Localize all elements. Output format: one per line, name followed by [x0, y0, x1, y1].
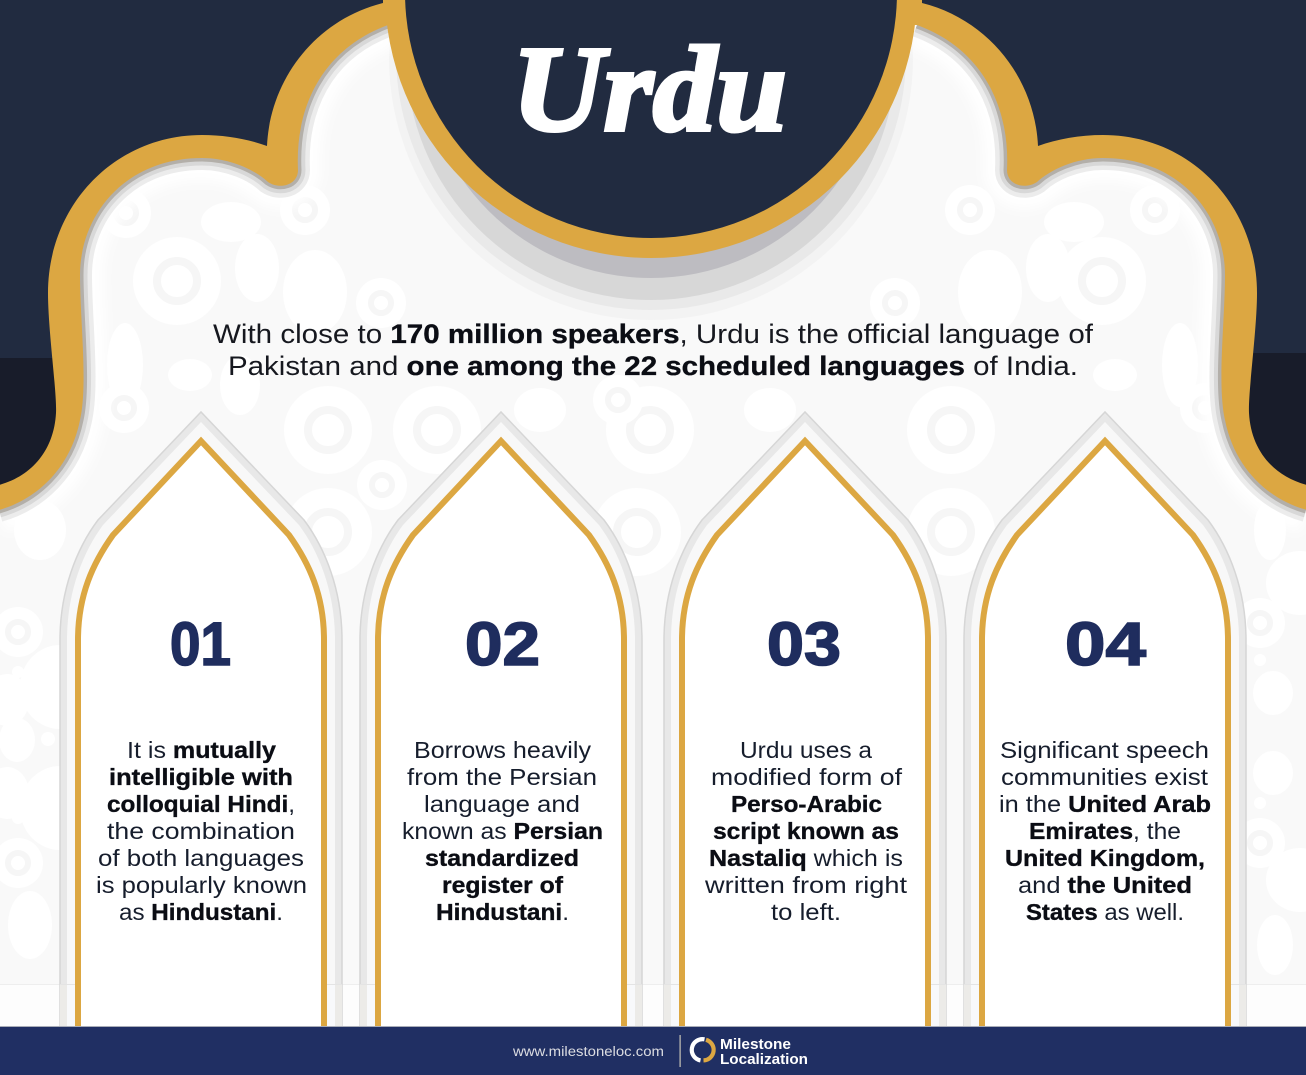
text 01 — [96, 737, 307, 925]
text 02 — [402, 737, 603, 925]
dark navy header background — [0, 0, 1306, 485]
text 04: in the United Arab — [999, 791, 1211, 817]
text 01: of both languages — [98, 845, 304, 871]
text 02: known as Persian — [402, 818, 603, 844]
title circle — [385, 0, 917, 258]
text 01: as Hindustani . — [119, 899, 283, 925]
text 01: colloquial Hindi , — [107, 791, 295, 817]
arch 02 — [360, 412, 642, 1040]
brand name — [720, 1037, 808, 1068]
brand name: Localization — [720, 1052, 808, 1068]
text 03: written from right — [704, 872, 908, 898]
frame inner shadow — [0, 25, 1306, 510]
number 01: 01 — [170, 610, 231, 678]
website url: www.milestoneloc.com — [512, 1044, 664, 1059]
text 04: Significant speech — [1000, 737, 1209, 763]
footer bar — [0, 1026, 1306, 1075]
brand name: Milestone — [720, 1037, 791, 1053]
text 02: standardized — [425, 845, 579, 871]
number 02: 02 — [465, 610, 540, 678]
icon: milestone logo — [692, 1039, 714, 1060]
text 03: Urdu uses a — [740, 737, 872, 763]
title: Urdu — [512, 22, 787, 157]
shadow under title circle — [389, 0, 913, 320]
text 03: script known as — [713, 818, 899, 844]
text 02: language and — [424, 791, 580, 817]
arch 01 — [60, 412, 342, 1040]
number 04: 04 — [1065, 610, 1146, 678]
text 03: Perso-Arabic — [731, 791, 882, 817]
intro text: With close to 170 million speakers , Urdu is the official language of — [213, 319, 1094, 349]
footer divider — [680, 1035, 681, 1067]
text 04: Emirates , the — [1029, 818, 1181, 844]
arch 03 — [664, 412, 946, 1040]
intro text — [213, 319, 1094, 381]
text 03 — [704, 737, 908, 925]
text 03: Nastaliq which is — [709, 845, 903, 871]
text 01: the combination — [107, 818, 295, 844]
text 02: register of — [442, 872, 563, 898]
text 02: from the Persian — [407, 764, 597, 790]
text 03: to left. — [771, 899, 841, 925]
text 04: States as well. — [1026, 899, 1184, 925]
text 01: It is mutually — [127, 737, 276, 763]
text 01: intelligible with — [109, 764, 293, 790]
text 01: is popularly known — [96, 872, 307, 898]
card 04 — [964, 412, 1246, 1040]
arch 04 — [964, 412, 1246, 1040]
text 02: Borrows heavily — [414, 737, 592, 763]
text 04 — [999, 737, 1211, 925]
card 02 — [360, 412, 642, 1040]
card 03 — [664, 412, 946, 1040]
text 04: communities exist — [1001, 764, 1209, 790]
intro text: Pakistan and one among the 22 scheduled languages of India. — [228, 351, 1078, 381]
text 04: United Kingdom, — [1005, 845, 1205, 871]
number 03: 03 — [767, 610, 841, 678]
text 02: Hindustani . — [436, 899, 569, 925]
text 04: and the United — [1018, 872, 1192, 898]
text 03: modified form of — [711, 764, 903, 790]
card 01 — [60, 412, 342, 1040]
gold scalloped frame — [0, 0, 1306, 510]
